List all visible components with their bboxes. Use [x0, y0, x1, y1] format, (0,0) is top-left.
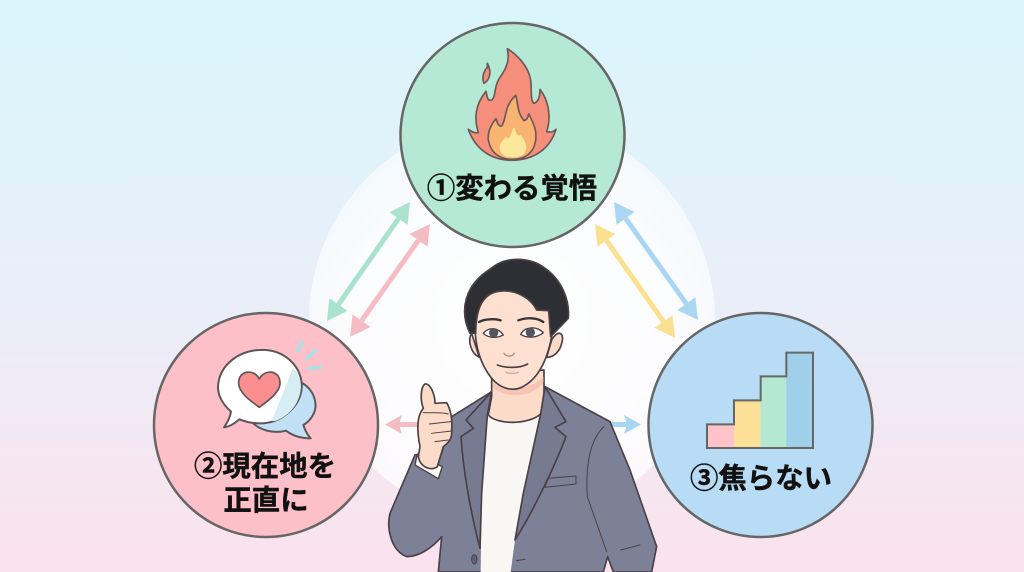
finger lines: [423, 413, 452, 442]
label: 3: ③焦らない: [690, 463, 832, 495]
panel: 3 do not rush: [648, 313, 872, 537]
arrow: small blue pointing right: [610, 415, 641, 434]
label: 2 line 2: 正直に: [223, 485, 309, 517]
eyes: [483, 329, 503, 337]
icon: speech bubbles with heart: [218, 342, 321, 438]
arrow: small pink pointing left: [385, 415, 420, 434]
icon: flame: [468, 49, 556, 160]
central white glow circle: [309, 117, 715, 523]
character: man giving thumbs up: [389, 259, 657, 572]
icon: rising steps chart: [707, 353, 813, 448]
neck shadow: [492, 377, 544, 395]
arrow: green between 1 and 2: [327, 202, 410, 321]
nose and mouth: [497, 353, 528, 373]
left lapel: [461, 392, 492, 548]
label: 2 line 1: ②現在地を: [194, 451, 336, 483]
arrow: blue between 1 and 3: [614, 202, 698, 320]
eyebrows: [479, 318, 543, 322]
face: [475, 280, 552, 389]
hair: [465, 259, 569, 337]
panel: 1 resolve to change: [400, 23, 624, 247]
arrow: yellow between 1 and 3: [595, 224, 675, 338]
label: 1: ①変わる覚悟: [427, 173, 597, 205]
sleeve cuff: [415, 454, 442, 479]
panel circle: green: [400, 23, 624, 247]
jacket: [389, 387, 657, 572]
jacket pocket and details: [472, 427, 640, 564]
panel: 2 be honest about where you are: [154, 313, 378, 537]
panel circle: blue: [648, 313, 872, 537]
right lapel: [515, 387, 566, 540]
hand with thumb up: [418, 384, 452, 469]
neck: [488, 370, 544, 422]
ears: [470, 333, 479, 357]
panel circle: pink: [154, 313, 378, 537]
t-shirt: [481, 414, 550, 572]
arrow: pink between 1 and 2: [350, 224, 430, 337]
